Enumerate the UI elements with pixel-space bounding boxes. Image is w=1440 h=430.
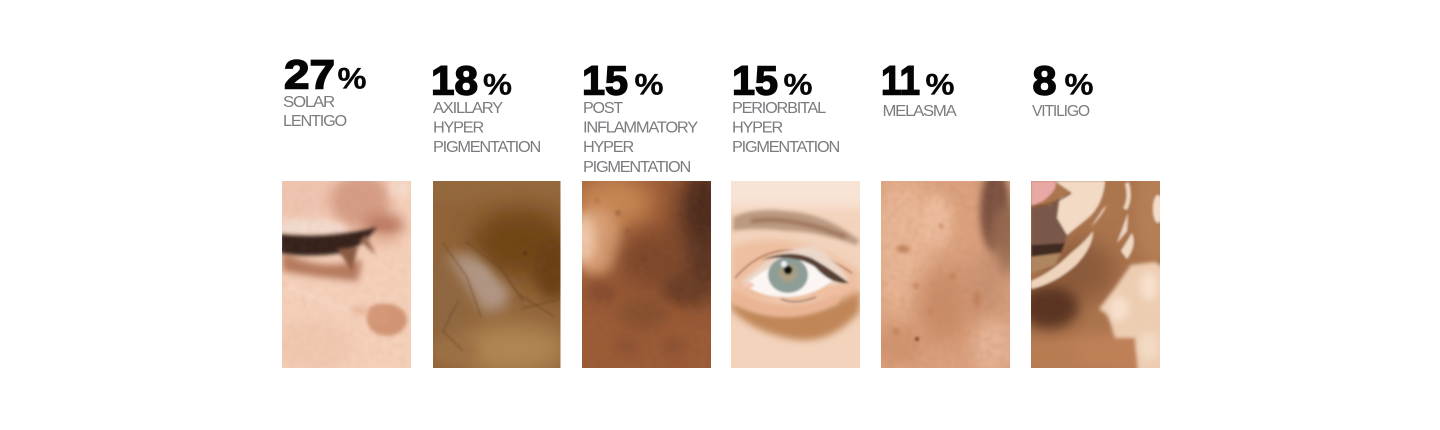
figure: 8 percent: 8	[1032, 58, 1056, 104]
photo: eye with dark circle	[731, 181, 860, 368]
label: post inflammatory hyper pigmentation: PIGMENTATION	[583, 159, 691, 176]
figure: 8 percent: %	[1064, 68, 1094, 102]
figure: 15 percent: 15	[582, 58, 628, 104]
label: axillary hyper pigmentation: HYPER	[433, 120, 484, 136]
photo: underarm skin	[433, 181, 560, 368]
column: melasma 11%	[873, 58, 1019, 373]
column: solar lentigo 27%	[262, 52, 416, 373]
photo: freckled cheek	[881, 181, 1010, 368]
label: vitiligo: VITILIGO	[1032, 103, 1090, 120]
label: periorbital hyper pigmentation: PIGMENTATION	[732, 139, 840, 156]
label: post inflammatory hyper pigmentation: POST	[583, 100, 623, 117]
figure: 18 percent: %	[483, 68, 512, 102]
figure: 11 percent: %	[926, 68, 954, 102]
label: axillary hyper pigmentation	[433, 100, 541, 156]
photo: chin and neck with vitiligo patches	[1031, 181, 1160, 368]
figure: 27 percent: %	[338, 62, 366, 96]
figure: 15 percent	[732, 58, 812, 104]
figure: 18 percent	[431, 58, 512, 104]
column: axillary hyperpigmentation 18%	[423, 58, 573, 375]
figure: 18 percent: 18	[431, 58, 478, 104]
column: vitiligo 8%	[1011, 58, 1191, 374]
label: periorbital hyper pigmentation: PERIORBITAL	[732, 100, 826, 117]
label: solar lentigo: SOLAR	[283, 94, 335, 111]
column: periorbital hyperpigmentation 15%	[721, 58, 871, 373]
figure: 11 percent	[881, 58, 954, 104]
label: axillary hyper pigmentation: AXILLARY	[433, 100, 504, 117]
label: periorbital hyper pigmentation: HYPER	[732, 120, 783, 136]
figure: 15 percent: %	[634, 68, 664, 102]
label: post inflammatory hyper pigmentation	[583, 100, 699, 176]
column: post inflammatory hyperpigmentation 15%	[570, 58, 724, 373]
figure: 15 percent: %	[784, 68, 812, 102]
label: periorbital hyper pigmentation	[732, 100, 840, 156]
label: post inflammatory hyper pigmentation: INFLAMMATORY	[583, 120, 699, 136]
label: solar lentigo	[283, 94, 347, 130]
label: solar lentigo: LENTIGO	[283, 113, 347, 130]
figure: 15 percent: 15	[732, 58, 778, 104]
figure: 11 percent: 11	[881, 58, 920, 104]
figure: 27 percent: 27	[284, 52, 335, 98]
photo: cheek with dark marks	[582, 181, 711, 368]
label: post inflammatory hyper pigmentation: HYPER	[583, 139, 634, 156]
label: axillary hyper pigmentation: PIGMENTATION	[433, 139, 541, 156]
figure: 15 percent	[582, 58, 664, 104]
figure: 8 percent	[1032, 58, 1094, 104]
photo: eye with solar lentigo spot	[282, 181, 411, 368]
label: melasma: MELASMA	[882, 103, 957, 120]
figure: 27 percent	[284, 52, 366, 98]
